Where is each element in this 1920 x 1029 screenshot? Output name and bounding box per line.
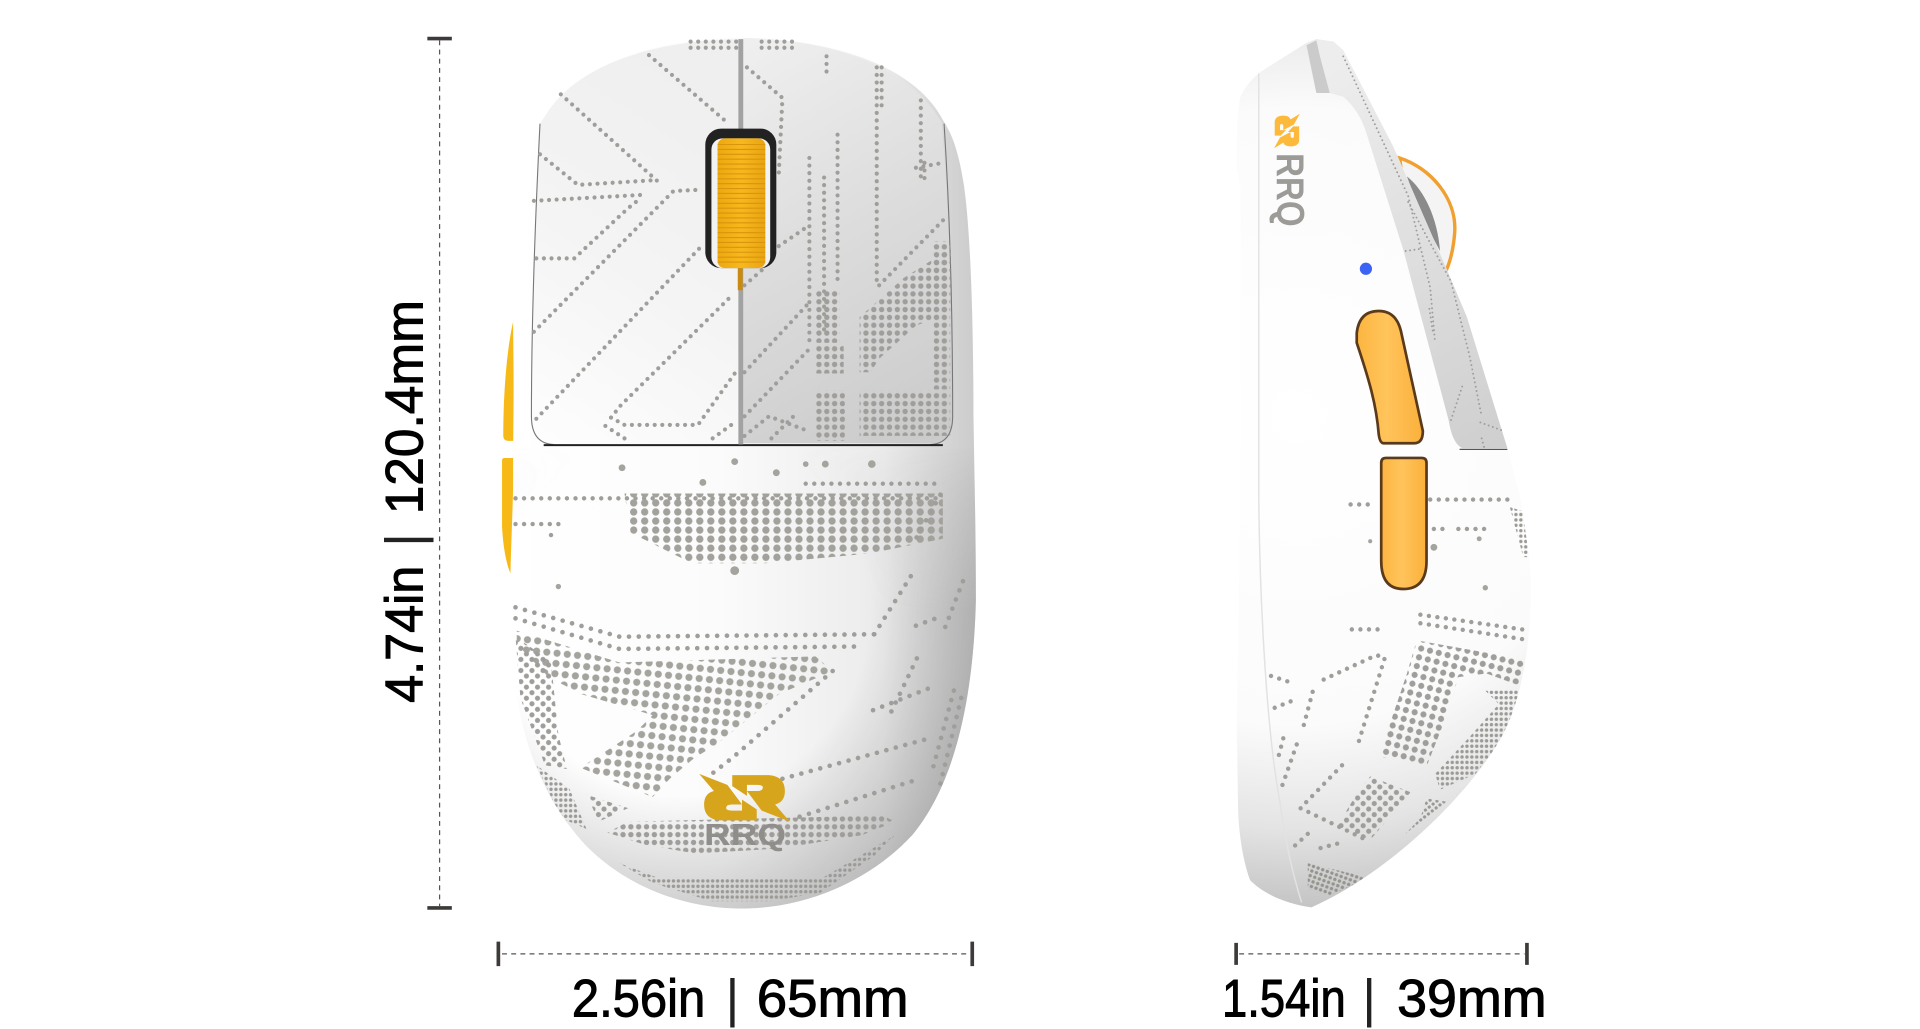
width label: 2.56in	[572, 969, 705, 1028]
RRQ logo mark	[699, 774, 790, 822]
plate faint dots	[1343, 56, 1504, 447]
RRQ side logo mark	[1274, 114, 1300, 148]
wheel opening	[1407, 176, 1440, 251]
left main button	[531, 39, 738, 443]
right button dot blocks	[814, 241, 950, 441]
upper body dot band	[624, 493, 943, 563]
dimension: depth	[1222, 943, 1547, 1028]
height label	[375, 300, 434, 703]
width label	[572, 969, 909, 1028]
status LED	[1360, 263, 1372, 275]
wheel rim	[1400, 158, 1455, 271]
right button dot pattern	[744, 42, 945, 438]
depth dashed line	[1239, 953, 1524, 955]
dimension: width	[498, 942, 972, 1028]
front slot	[1307, 40, 1330, 93]
dimension: height	[375, 39, 452, 908]
RRQ wordmark: RRQ	[704, 818, 786, 852]
body shell	[510, 38, 976, 909]
side bottom right texture	[1406, 788, 1464, 834]
height dashed line	[439, 40, 441, 906]
side bottom dense block	[1308, 863, 1363, 895]
width label: 65mm	[757, 969, 909, 1028]
wheel slit	[738, 268, 742, 290]
side shell seam	[1259, 73, 1302, 902]
side view of mouse	[1237, 39, 1531, 907]
scroll wheel housing	[705, 129, 776, 268]
wheel side walls	[711, 138, 770, 268]
height end ticks	[427, 39, 452, 908]
scattered dots below buttons	[556, 458, 876, 589]
bottom texture	[620, 835, 895, 901]
depth label: |	[1362, 969, 1376, 1028]
depth label: 39mm	[1397, 969, 1547, 1028]
left button dot pattern	[534, 42, 737, 438]
side main dot field	[1379, 640, 1528, 767]
logo left half	[699, 774, 757, 820]
side dot rows	[1271, 500, 1531, 850]
side logo half two	[1275, 114, 1300, 136]
logo right half	[732, 775, 790, 822]
side button lower	[502, 458, 516, 580]
button bottom seam	[544, 444, 943, 446]
side shell	[1237, 39, 1531, 907]
button outline	[531, 124, 953, 444]
side body dots	[1271, 500, 1531, 895]
band below logo	[607, 816, 895, 853]
left lower texture	[536, 765, 587, 829]
wheel ribs	[718, 144, 765, 262]
height label: |	[375, 533, 434, 547]
right main button	[743, 38, 953, 443]
width end ticks	[498, 942, 972, 966]
side dot block lower	[1337, 776, 1411, 840]
body lower shading	[527, 482, 976, 908]
plate seam	[1460, 448, 1507, 450]
wheel tread	[718, 138, 765, 268]
side right edge texture	[1510, 508, 1528, 558]
side button upper	[1357, 311, 1423, 443]
side logo half one	[1274, 126, 1299, 148]
side single dots	[1368, 536, 1488, 590]
side button upper	[503, 322, 514, 441]
side lower edge band	[1435, 691, 1524, 790]
lower body dots	[516, 495, 966, 901]
top view of mouse	[502, 38, 986, 917]
side button lower	[1381, 458, 1427, 589]
logo area dot block	[587, 795, 628, 822]
lower body main dot field	[517, 631, 833, 797]
body dot rows	[516, 484, 943, 539]
mouse dimensions diagram	[384, 36, 1544, 1028]
height label: 120.4mm	[375, 300, 434, 514]
side scroll wheel	[1400, 158, 1455, 271]
left button plate	[1316, 39, 1507, 448]
scroll wheel	[711, 138, 770, 268]
lower body dot rows	[516, 495, 966, 817]
width label: |	[726, 969, 739, 1028]
width dashed line	[502, 953, 970, 955]
centre split	[739, 39, 743, 444]
depth end ticks	[1236, 943, 1527, 965]
depth label: 1.54in	[1222, 969, 1346, 1028]
lower body left strip	[516, 637, 567, 769]
height label: 4.74in	[375, 566, 434, 703]
RRQ side wordmark: RRQ	[1268, 153, 1311, 227]
depth label	[1222, 969, 1547, 1028]
